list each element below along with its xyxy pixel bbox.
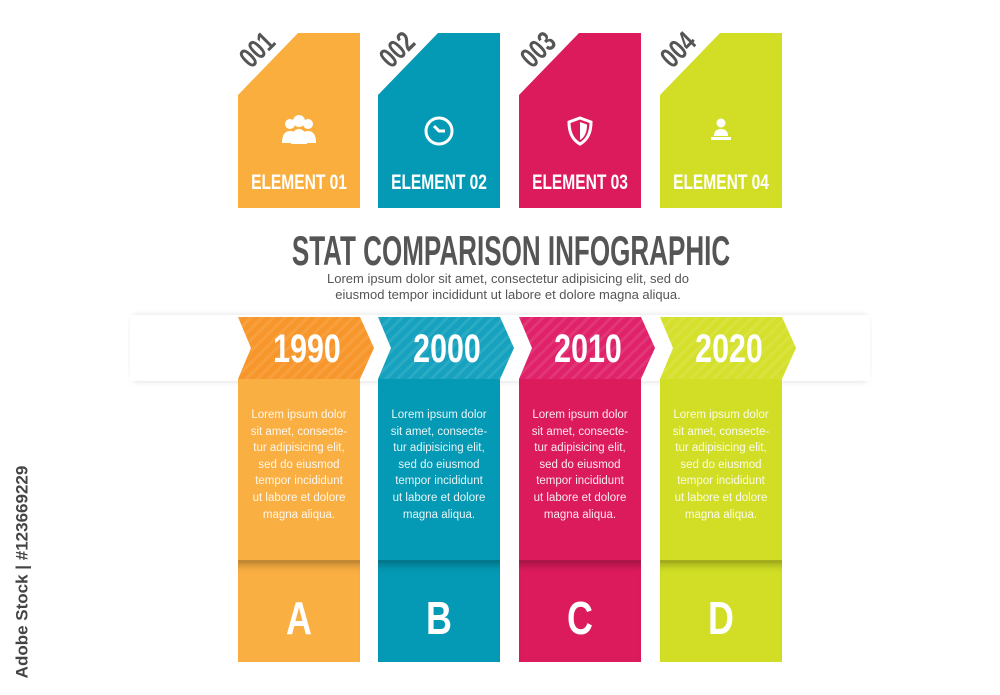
column A: tur adipisicing elit, (253, 442, 345, 454)
column A: ut labore et dolore (253, 492, 345, 504)
column B: sed do eiusmod (398, 459, 480, 471)
label: ELEMENT 04 (673, 171, 769, 194)
number 004: 004 (654, 26, 703, 74)
column A (238, 379, 360, 662)
arrow 2020: 2020 (695, 327, 763, 371)
column D (660, 379, 782, 662)
letter B: B (426, 592, 452, 644)
column B: tempor incididunt (395, 475, 483, 487)
column C: sit amet, consecte- (532, 426, 628, 438)
column B: sit amet, consecte- (391, 426, 487, 438)
number 001: 001 (233, 26, 282, 74)
number 002: 002 (373, 26, 422, 74)
arrow 1990 (238, 317, 374, 379)
column B: tur adipisicing elit, (393, 442, 485, 454)
column A: sed do eiusmod (258, 459, 340, 471)
column C: sed do eiusmod (539, 459, 621, 471)
arrow 1990: 1990 (273, 327, 341, 371)
column C: Lorem ipsum dolor (532, 409, 628, 421)
letter D (660, 560, 782, 665)
number 003: 003 (514, 26, 563, 74)
column C: tur adipisicing elit, (534, 442, 626, 454)
letter D: D (708, 592, 734, 644)
column B: magna aliqua. (403, 509, 475, 521)
subtitle: Lorem ipsum dolor sit amet, consectetur adipisicing elit, sed do (327, 271, 689, 286)
column B: ut labore et dolore (393, 492, 485, 504)
subtitle (327, 271, 689, 302)
column D: magna aliqua. (685, 509, 757, 521)
watermark id: Adobe Stock | #123669229 (12, 466, 32, 678)
letter C: C (567, 592, 593, 644)
icon: shield (568, 116, 592, 146)
column D: ut labore et dolore (675, 492, 767, 504)
letter B (378, 560, 500, 665)
icon: clock (424, 116, 454, 146)
label: ELEMENT 02 (391, 171, 487, 194)
column A: sit amet, consecte- (251, 426, 347, 438)
arrow 2020 (660, 317, 796, 379)
band shadow (130, 315, 870, 381)
column D: tur adipisicing elit, (675, 442, 767, 454)
column B (378, 379, 500, 662)
label: ELEMENT 01 (251, 171, 347, 194)
letter A (238, 560, 360, 665)
card 1 (238, 33, 360, 208)
column C: magna aliqua. (544, 509, 616, 521)
arrow 2000 (378, 317, 514, 379)
card 4 (660, 33, 782, 208)
column D: sed do eiusmod (680, 459, 762, 471)
letter A: A (286, 592, 312, 644)
icon: user at laptop (711, 118, 731, 140)
column D: Lorem ipsum dolor (673, 409, 769, 421)
column B: Lorem ipsum dolor (391, 409, 487, 421)
arrow 2010: 2010 (554, 327, 622, 371)
subtitle: eiusmod tempor incididunt ut labore et dolore magna aliqua. (335, 286, 681, 302)
column C: ut labore et dolore (534, 492, 626, 504)
title: STAT COMPARISON INFOGRAPHIC (292, 227, 730, 274)
arrow 2000: 2000 (413, 327, 481, 371)
letter C (519, 560, 641, 665)
column A: magna aliqua. (263, 509, 335, 521)
column C: tempor incididunt (536, 475, 624, 487)
column D: sit amet, consecte- (673, 426, 769, 438)
card 2 (378, 33, 500, 208)
icon: people (282, 115, 316, 144)
arrow 2010 (519, 317, 655, 379)
label: ELEMENT 03 (532, 171, 628, 194)
card 3 (519, 33, 641, 208)
column A: tempor incididunt (255, 475, 343, 487)
column C (519, 379, 641, 662)
column D: tempor incididunt (677, 475, 765, 487)
column A: Lorem ipsum dolor (251, 409, 347, 421)
